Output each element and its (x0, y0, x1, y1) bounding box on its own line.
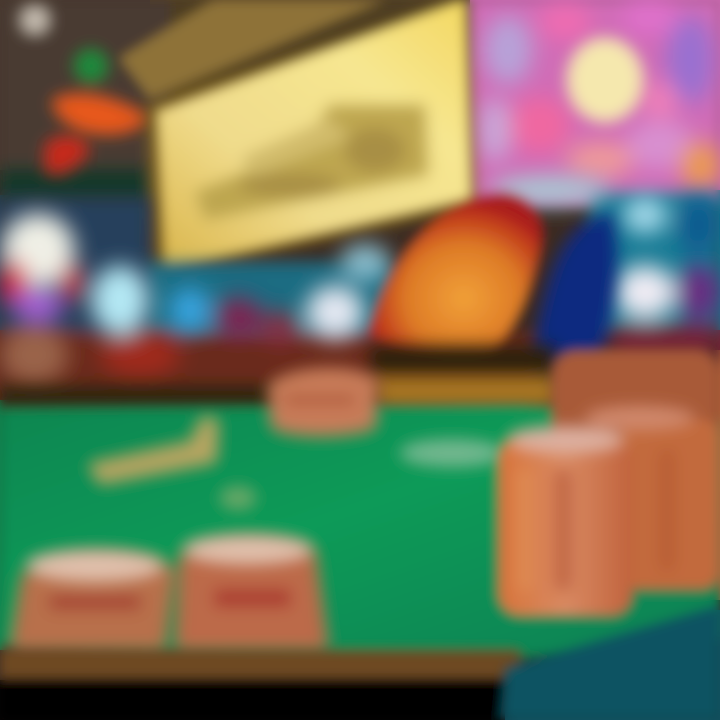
band: dark green under ceiling (0, 168, 150, 202)
band: mid wall (0, 198, 540, 392)
lights: right mid (610, 264, 720, 357)
lights: left cluster (0, 214, 389, 385)
decoration: green and orange ornament (45, 49, 150, 174)
shape: blue chair back (530, 212, 618, 368)
panel: pink patterned wall (470, 0, 720, 205)
ceiling: top left (0, 0, 470, 200)
shape: red and orange dome (368, 193, 542, 355)
panel: teal wall right (490, 176, 720, 332)
felt markings (88, 416, 504, 509)
chip stack: small centre (268, 368, 378, 436)
panel: golden sign (158, 0, 470, 268)
icon: ceiling light (20, 5, 50, 35)
sign frame (148, 0, 476, 276)
band: table edge (0, 650, 520, 680)
chip stacks: right (498, 350, 720, 616)
panel: green felt table (0, 405, 720, 660)
blurred sign lettering (195, 105, 428, 220)
shape: dark teal foreground right (500, 605, 720, 720)
chip stacks: bottom left (10, 536, 328, 650)
band: table rail (0, 345, 555, 407)
band: dark foreground (0, 680, 510, 720)
